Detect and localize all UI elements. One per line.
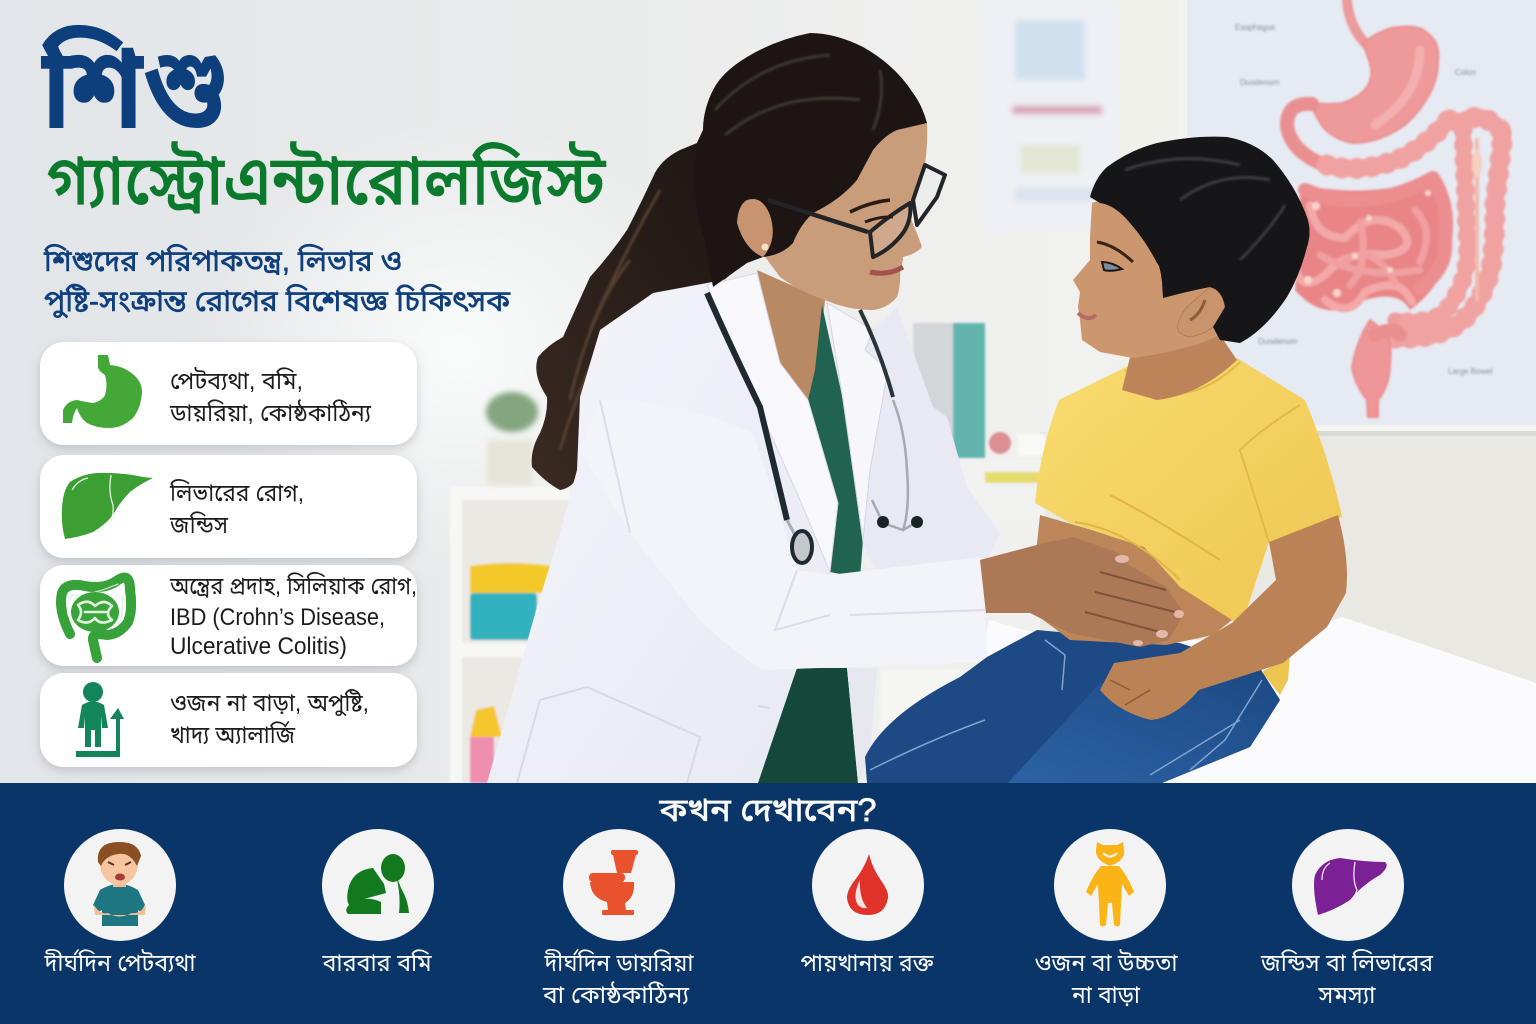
symptom: poor weight or height gain (1034, 829, 1178, 1009)
chart leader labels (1235, 23, 1493, 376)
icon: person vomiting (346, 854, 409, 914)
doctor neck (757, 270, 825, 407)
symptom: blood in stool: পায়খানায় রক্ত (800, 950, 935, 977)
card: liver conditions: জন্ডিস (169, 511, 229, 539)
rectum (1352, 320, 1391, 417)
subtitle: শিশুদের পরিপাকতন্ত্র, লিভার ও (43, 243, 402, 278)
symptom: long-term stomach ache (44, 829, 196, 977)
icon: blood drop (847, 854, 888, 915)
child belly (1030, 515, 1232, 645)
examination bed (960, 617, 1536, 783)
title: গ্যাস্ট্রোএন্টারোলজিস্ট: গ্যাস্ট্রোএন্টারোলজিস্ট (47, 143, 606, 219)
symptom: blood in stool (800, 829, 935, 977)
child ear (1177, 287, 1225, 337)
symptom: jaundice or liver problems: সমস্যা (1318, 982, 1376, 1009)
title: শিশু: শিশু (40, 25, 228, 153)
symptom: long-term stomach ache: দীর্ঘদিন পেটব্যথা (44, 948, 196, 977)
child back shirt tail (1262, 655, 1290, 695)
chart leader labels: Large Bowel (1448, 367, 1493, 376)
symptom: jaundice or liver problems (1260, 829, 1434, 1009)
doctor scrubs lower (758, 668, 858, 783)
doctor brow, eye and mouth (850, 200, 903, 273)
child t-shirt (1035, 358, 1342, 630)
card: liver conditions: লিভারের রোগ, (169, 479, 304, 507)
subtitle (43, 243, 511, 318)
child face (1073, 190, 1225, 358)
symptom: long-term diarrhoea or constipation: বা কোষ্ঠকাঠিন্য (542, 980, 690, 1009)
esophagus (1347, 0, 1368, 46)
doctor face (759, 123, 927, 310)
digestive organs illustration (1287, 0, 1503, 417)
symptom: jaundice or liver problems: জন্ডিস বা লিভারের (1260, 949, 1434, 977)
card: stomach conditions (40, 342, 417, 445)
icon: child growth (76, 682, 124, 757)
doctor glasses (768, 165, 945, 257)
card: bowel conditions: IBD (Crohn’s Disease, (170, 604, 385, 631)
doctor hand on belly (980, 537, 1184, 647)
icon: child figure (1086, 842, 1134, 926)
panel: when to see the doctor (0, 783, 1536, 1024)
child jeans near leg (1008, 670, 1280, 783)
card: growth conditions: ওজন না বাড়া, অপুষ্টি, (170, 689, 369, 717)
symptom: long-term diarrhoea or constipation: দীর্ঘদিন ডায়রিয়া (544, 948, 694, 977)
illustration: child patient (865, 137, 1347, 783)
doctor left lapel (707, 273, 838, 572)
ascending and descending colon (1393, 117, 1503, 338)
child arm and hand (1100, 515, 1347, 720)
card: growth conditions (40, 673, 417, 767)
icon: stomach (63, 355, 142, 428)
doctor ponytail (532, 130, 760, 490)
card: bowel conditions: Ulcerative Colitis) (170, 633, 347, 660)
icon: liver (62, 473, 153, 539)
chart leader labels: Duodenum (1240, 78, 1279, 87)
card: liver conditions (40, 455, 417, 558)
doctor coat pocket (517, 687, 770, 783)
chart leader labels: Duodenum (1258, 337, 1297, 346)
chart leader labels: Colon (1455, 68, 1476, 77)
doctor sleeve (580, 400, 988, 670)
doctor coat lower right (847, 668, 877, 783)
transverse colon (1327, 118, 1450, 169)
background plant (486, 392, 538, 485)
card: growth conditions: খাদ্য অ্যালার্জি (170, 720, 295, 749)
child neck (1122, 335, 1237, 400)
doctor coat right panel (827, 303, 1000, 580)
symptom: repeated vomiting (322, 829, 434, 977)
card: stomach conditions: পেটব্যথা, বমি, (170, 367, 303, 395)
illustration: doctor (487, 33, 1000, 783)
child hair (1090, 137, 1310, 343)
subtitle: পুষ্টি-সংক্রান্ত রোগের বিশেষজ্ঞ চিকিৎসক (44, 283, 511, 318)
duodenum (1287, 104, 1327, 166)
card: stomach conditions: ডায়রিয়া, কোষ্ঠকাঠিন্য (169, 398, 371, 427)
symptom: poor weight or height gain: ওজন বা উচ্চতা (1034, 949, 1178, 977)
doctor right lapel (827, 303, 888, 540)
doctor coat torso (487, 273, 830, 783)
icon: toilet (589, 850, 638, 915)
icon: intestines (61, 578, 131, 658)
doctor hair (695, 33, 927, 287)
poster: small wall chart (983, 0, 1116, 230)
doctor ear (737, 199, 773, 257)
background shelf with toys (450, 487, 570, 783)
card: bowel conditions: অন্ত্রের প্রদাহ, সিলিয়াক রোগ, (169, 572, 417, 600)
poster: digestive system chart (1178, 0, 1536, 436)
symptom: repeated vomiting: বারবার বমি (322, 949, 432, 977)
doctor scrubs upper (808, 305, 863, 578)
symptom: long-term diarrhoea or constipation (542, 829, 694, 1009)
icon: purple liver (1314, 858, 1387, 915)
background: clinic room (0, 0, 1536, 783)
chart leader labels: Esophagus (1235, 23, 1275, 32)
card: bowel conditions (40, 565, 417, 666)
small intestine (1295, 175, 1447, 310)
child jeans far leg (865, 630, 1280, 783)
stomach (1310, 27, 1438, 143)
symptom: poor weight or height gain: না বাড়া (1071, 982, 1141, 1009)
heading: কখন দেখাবেন? (658, 792, 876, 828)
stethoscope (707, 293, 923, 563)
icon: child with stomach ache (93, 842, 146, 926)
background medical device (880, 323, 1046, 783)
child eye, brow and mouth (1078, 242, 1133, 318)
